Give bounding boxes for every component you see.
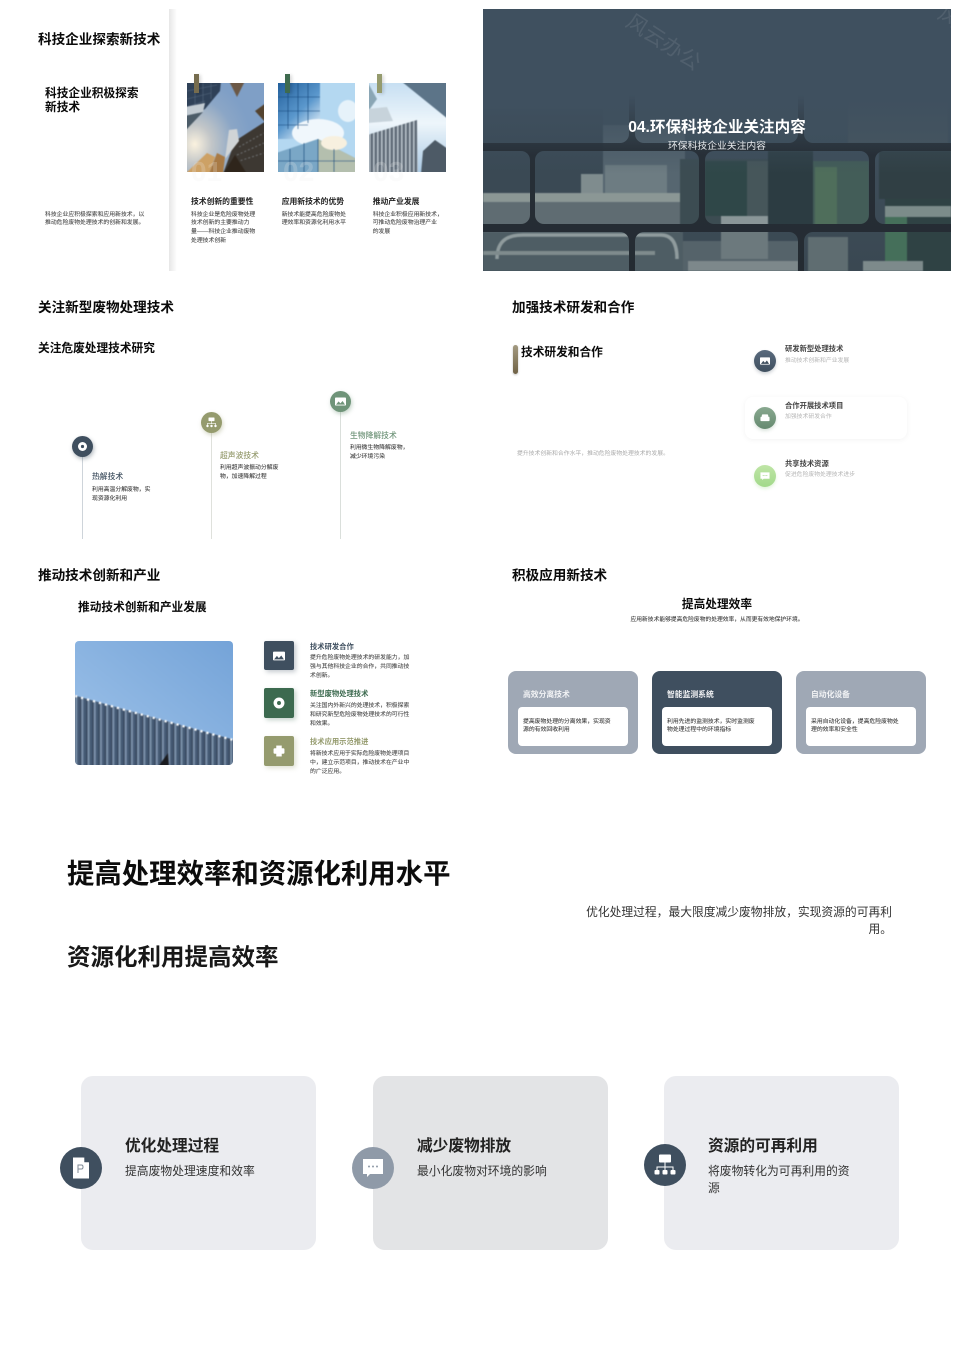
card text 2 [282, 196, 346, 226]
heading: 加强技术研发和合作 [512, 300, 634, 315]
timeline node: biodegradation [329, 391, 408, 539]
heading: 推动技术创新和产业 [38, 568, 160, 583]
card body: 科技企业是危险废物处理 [191, 212, 255, 218]
card text: 将废物转化为可再利用的资 [708, 1164, 850, 1178]
photo: glass tower [278, 83, 355, 172]
photo: grey skyscraper [369, 83, 446, 172]
panel: slide 1 explore new technology [38, 9, 446, 271]
subheading: 技术研发和合作 [521, 346, 603, 359]
secondary title: 资源化利用提高效率 [67, 944, 278, 970]
item: demonstration [264, 736, 409, 775]
panel: slide 6 apply new technology [508, 568, 926, 754]
side shadow band [169, 9, 177, 271]
icon: picture [330, 390, 351, 412]
item: cooperation [753, 401, 843, 432]
card body: 新技术能提高危险废物处 [282, 212, 346, 218]
card text: 利用先进的监测技术，实时监测废 [667, 719, 755, 725]
item text: 推动技术创新和产业发展 [785, 358, 849, 364]
subheading: 新技术 [45, 101, 80, 114]
panel: slide 5 innovation and industry [38, 568, 410, 775]
item: research [752, 344, 849, 376]
photo: industrial plant with window frame [483, 106, 951, 271]
card title: 减少废物排放 [417, 1138, 511, 1154]
card text: 理的效率和安全性 [811, 727, 858, 733]
timeline node: ultrasonic [200, 412, 278, 539]
card text: 采用自动化设备，提高危险废物处 [811, 719, 899, 725]
icon: picture [264, 640, 294, 670]
node title: 生物降解技术 [350, 430, 397, 440]
subheading [45, 86, 139, 114]
item text: 中，建立示范项目，推动技术在产业中 [310, 760, 409, 766]
card title: 推动产业发展 [373, 197, 419, 206]
section subtitle: 环保科技企业关注内容 [668, 140, 766, 152]
card text [811, 718, 899, 733]
card text: 最小化废物对环境的影响 [417, 1164, 547, 1178]
icon: hierarchy [644, 1144, 686, 1186]
item text [310, 750, 409, 775]
timeline node: pyrolysis [70, 436, 150, 539]
item text: 术创新。 [310, 673, 333, 679]
panel: slide 3 new waste treatment [38, 300, 408, 539]
card title: 技术创新的重要性 [191, 197, 253, 206]
item: sharing [753, 459, 855, 490]
card inner box [662, 707, 772, 746]
icon: target [72, 436, 93, 457]
right description: 优化处理过程，最大限度减少废物排放，实现资源的可再利 [586, 906, 892, 918]
heading: 积极应用新技术 [512, 568, 607, 583]
subheading: 科技企业积极探索 [45, 87, 139, 100]
card body: 的发展 [373, 229, 390, 235]
item text: 关注国内外新兴的处理技术，积极探索 [310, 703, 409, 709]
node title: 超声波技术 [220, 450, 259, 460]
item text [310, 702, 410, 727]
item title: 技术研发合作 [310, 642, 354, 651]
item text: 的广泛应用。 [310, 769, 345, 775]
card body: 可推动危险废物治理产业 [373, 220, 437, 226]
photo: skyscrapers one [187, 83, 264, 172]
node body [350, 444, 408, 460]
icon: printer [264, 736, 294, 766]
node body: 减少环境污染 [350, 454, 385, 460]
card title: 应用新技术的优势 [282, 197, 344, 206]
node body [92, 486, 150, 502]
card text [667, 718, 755, 733]
ghost number 02: 02 [283, 156, 314, 187]
node body: 利用高温分解废物，实 [92, 487, 150, 493]
photo: building facade against sky [75, 641, 233, 765]
highlight card [745, 397, 907, 439]
icon: chat [754, 465, 776, 487]
ghost number 01: 01 [191, 156, 222, 187]
heading: 科技企业探索新技术 [38, 32, 160, 47]
accent bar [513, 345, 518, 374]
subheading: 关注危废处理技术研究 [38, 342, 155, 355]
heading: 关注新型废物处理技术 [38, 300, 174, 315]
card: reduce [373, 1076, 608, 1250]
card text: 提高废物处理速度和效率 [125, 1164, 255, 1178]
node body: 现资源化利用 [92, 496, 127, 502]
card title: 优化处理过程 [125, 1138, 219, 1154]
item title: 合作开展技术项目 [785, 401, 843, 410]
card title: 资源的可再利用 [708, 1138, 818, 1154]
item title: 共享技术资源 [785, 459, 829, 468]
item text: 加强技术研发合作 [785, 414, 832, 420]
node body: 利用超声波振动分解废 [220, 465, 278, 471]
grey description: 提升技术创新和合作水平，推动危险废物处理技术的发展。 [517, 451, 669, 457]
icon: document [60, 1147, 102, 1189]
tab 3 [376, 74, 382, 93]
node title: 热解技术 [92, 472, 123, 480]
card body: 处理技术创新 [191, 238, 226, 244]
stem [82, 457, 83, 539]
panel: slide 2 section cover [483, 9, 951, 271]
item: research cooperation [264, 640, 410, 679]
item text: 将新技术应用于实际危险废物处理项目 [310, 751, 409, 757]
card body: 技术创新的主要推动力 [191, 220, 249, 226]
centered subheading: 提高处理效率 [682, 598, 752, 611]
card body [372, 210, 443, 235]
card: optimise [81, 1076, 316, 1250]
item text: 和研究新型危险废物处理技术的可行性 [310, 712, 409, 718]
card: monitoring [652, 671, 782, 754]
right description: 用。 [868, 922, 892, 936]
main title: 提高处理效率和资源化利用水平 [67, 858, 450, 889]
card: automation [796, 671, 926, 754]
subheading: 推动技术创新和产业发展 [78, 601, 207, 614]
card: reuse [664, 1076, 899, 1250]
item title: 技术应用示范推进 [310, 737, 368, 746]
node body: 利用微生物降解废物， [350, 445, 408, 451]
card: separation [508, 671, 638, 754]
summary text: 推动危险废物处理技术的创新和发展。 [45, 220, 144, 226]
centered description: 应用新技术能够提高危险废物的处理效率，从而更有效地保护环境。 [630, 617, 803, 623]
icon: speech bubble [352, 1147, 394, 1189]
item title: 研发新型处理技术 [785, 344, 843, 353]
card text [523, 718, 611, 733]
icon: picture [754, 350, 776, 372]
icon: hierarchy [200, 412, 222, 432]
card body: 量——科技企业推动废物 [191, 229, 255, 235]
card title: 高效分离技术 [523, 690, 570, 699]
tab 2 [285, 74, 290, 93]
node body [220, 464, 278, 480]
right description [586, 906, 892, 936]
card text 1 [191, 197, 256, 244]
card text: 源 [708, 1180, 720, 1194]
panel: slide 4 research cooperation [512, 300, 855, 490]
item title: 新型废物处理技术 [310, 689, 368, 698]
card body [191, 210, 256, 244]
card title: 智能监测系统 [667, 690, 714, 699]
card body [282, 210, 346, 226]
watermark: 风云办公 [622, 10, 705, 75]
tab 1 [194, 74, 199, 93]
summary text [45, 210, 144, 226]
icon: sofa [754, 407, 776, 429]
card text: 提高废物处理的分离效果，实现资 [523, 719, 611, 725]
stem [340, 412, 341, 539]
card text: 物处理过程中的环境指标 [667, 727, 731, 733]
item text [310, 654, 410, 679]
item text: 和效果。 [310, 721, 333, 727]
card text: 源的有效回收利用 [523, 727, 570, 733]
stem [210, 432, 212, 539]
card body: 理效率和资源化利用水平 [282, 220, 346, 226]
ghost number 03: 03 [373, 156, 404, 187]
icon: target [264, 688, 294, 718]
card text 3 [372, 197, 443, 235]
panel: slide 7 efficiency and resource use [60, 858, 899, 1250]
card inner box [518, 707, 628, 746]
item text: 强与其他科技企业的合作，共同推动技 [310, 664, 409, 670]
card inner box [806, 707, 916, 746]
card title: 自动化设备 [811, 690, 850, 699]
item: new treatment [264, 688, 410, 727]
summary text: 科技企业应积极探索和应用新技术，以 [45, 212, 144, 218]
section title: 04.环保科技企业关注内容 [628, 118, 806, 136]
card body: 科技企业积极应用新技术， [373, 212, 443, 218]
item text: 提升危险废物处理技术的研发能力，加 [310, 655, 409, 661]
item text: 促进危险废物处理技术进步 [785, 472, 855, 478]
card text [708, 1164, 850, 1194]
node body: 物，加速降解过程 [220, 474, 267, 480]
